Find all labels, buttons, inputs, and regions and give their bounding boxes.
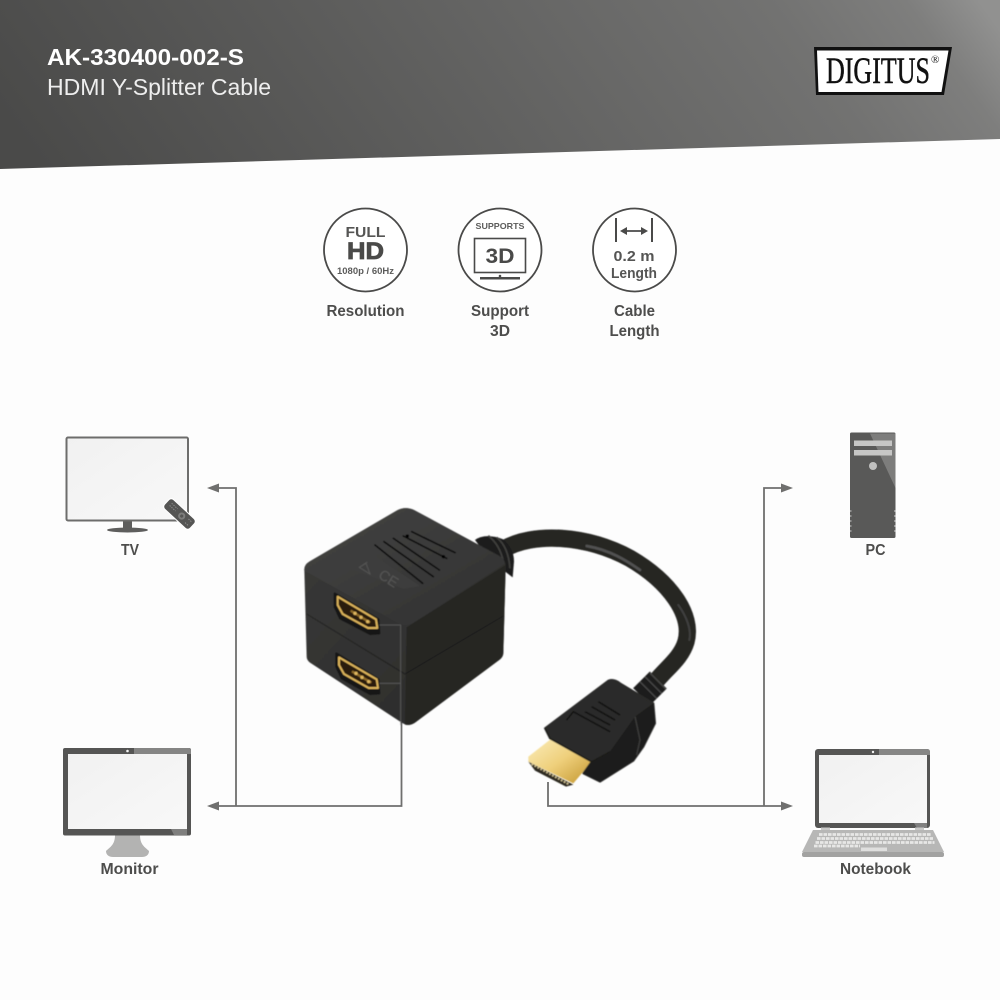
badge: 0.2 m: Length <box>611 265 657 282</box>
badge: 0.2 m: 0.2 m <box>614 248 654 265</box>
label: Monitor: Monitor <box>100 861 158 878</box>
label recess with CE mark <box>343 552 420 589</box>
plug grip marks <box>567 702 620 732</box>
top face <box>304 508 504 625</box>
seam <box>307 614 503 674</box>
header band <box>0 0 1000 169</box>
HDMI port lower <box>336 653 379 694</box>
badge: Full HD <box>324 208 407 292</box>
device: Notebook <box>802 749 944 878</box>
gold contact shell <box>528 738 592 783</box>
feature: cable length: Length <box>610 323 660 340</box>
badge: Full HD: 1080p / 60Hz <box>337 266 395 276</box>
plug body <box>545 680 655 782</box>
label: PC: PC <box>866 542 886 559</box>
device: Monitor <box>63 748 191 878</box>
badge: Full HD: HD <box>347 238 384 265</box>
feature: 3D support: 3D <box>490 323 510 340</box>
badge: 3D: SUPPORTS <box>476 221 525 231</box>
product photo: HDMI Y-splitter cable <box>304 508 690 787</box>
logo: DIGITUS: DIGITUS <box>826 51 930 92</box>
notebook lid <box>815 749 930 828</box>
badge: 0.2 m <box>593 208 676 292</box>
monitor stand <box>106 835 149 857</box>
logo: DIGITUS <box>814 47 952 95</box>
label: Resolution: Resolution <box>326 303 404 320</box>
badge: Full HD: FULL <box>346 224 386 241</box>
remote control <box>162 497 197 531</box>
arrows: splitter ports to TV and Monitor <box>207 484 402 810</box>
splitter housing <box>304 508 506 725</box>
device: TV <box>66 438 197 559</box>
product code: AK-330400-002-S <box>47 44 244 70</box>
strain relief near splitter <box>475 536 514 577</box>
cable <box>503 538 690 687</box>
arrows: plug to PC and Notebook <box>548 484 793 810</box>
badge: 3D <box>458 208 542 292</box>
label: Support 3D: Support <box>471 303 530 320</box>
HDMI port upper <box>335 593 379 634</box>
label: TV: TV <box>121 542 139 559</box>
label: Notebook: Notebook <box>840 861 911 878</box>
TV screen <box>66 438 188 520</box>
strain relief near plug <box>640 673 666 698</box>
label: Cable Length: Cable <box>614 303 655 320</box>
feature: cable length <box>593 208 676 340</box>
splitter housing: CE <box>375 567 401 592</box>
HDMI plug <box>528 680 655 787</box>
feature: Full HD resolution <box>324 208 407 320</box>
badge: 3D: 3D <box>486 245 514 268</box>
TV stand <box>123 522 132 528</box>
grip ribs <box>375 532 455 583</box>
logo: DIGITUS: ® <box>931 54 939 66</box>
PC tower <box>850 432 896 538</box>
product name: HDMI Y-Splitter Cable <box>47 74 271 100</box>
right face <box>405 565 506 725</box>
feature: 3D support <box>458 208 542 340</box>
port leader lines <box>379 625 401 725</box>
monitor frame <box>63 748 191 836</box>
device: PC <box>850 432 896 559</box>
notebook base and keyboard <box>802 828 944 857</box>
